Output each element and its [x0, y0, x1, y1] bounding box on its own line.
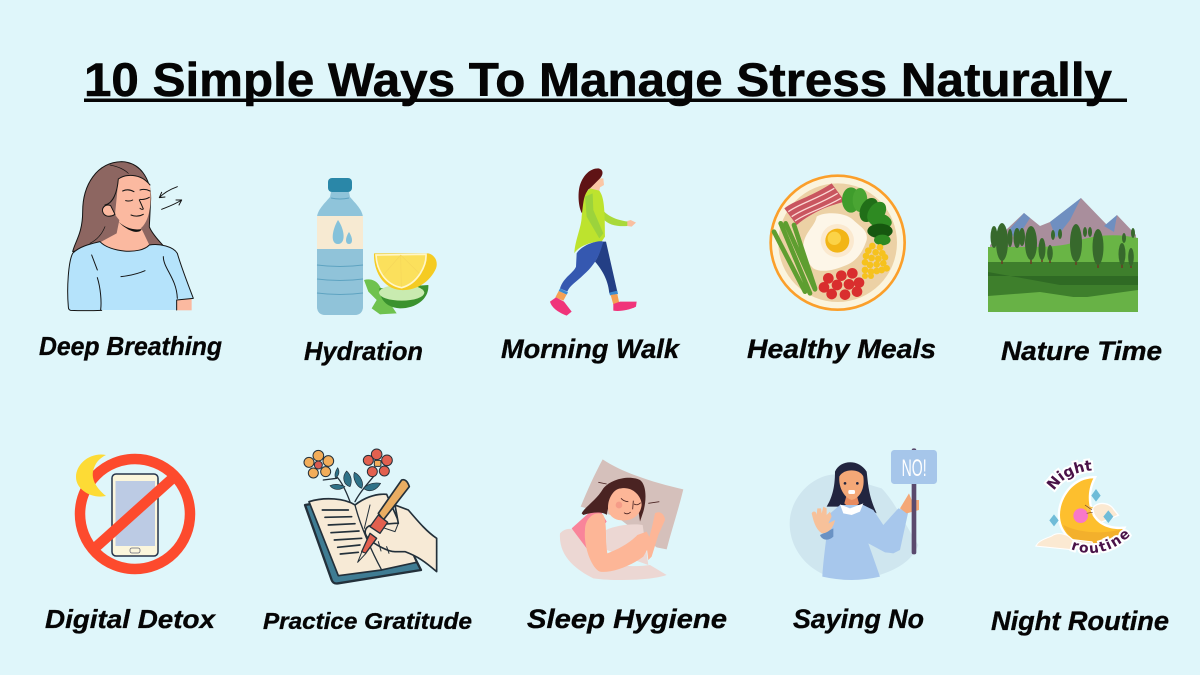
icon: water bottle [317, 178, 363, 315]
panel: night routine [991, 458, 1169, 636]
panel: sleep hygiene [527, 459, 727, 634]
label: Deep Breathing: Deep Breathing [39, 331, 222, 361]
panel: practice gratitude [263, 449, 472, 634]
panel: deep breathing [39, 162, 222, 361]
label: Nature Time: Nature Time [1001, 336, 1162, 366]
label: Sleep Hygiene: Sleep Hygiene [527, 604, 727, 634]
label: Hydration: Hydration [304, 336, 423, 366]
sticker word routine: routine [1069, 529, 1132, 556]
label: Practice Gratitude: Practice Gratitude [263, 608, 472, 634]
icon: mountain landscape [988, 198, 1138, 312]
label: Night Routine: Night Routine [991, 606, 1169, 636]
label: Morning Walk: Morning Walk [501, 334, 681, 364]
icon: mint, cucumber and lemon [364, 253, 437, 314]
title: 10 Simple Ways To Manage Stress Naturally [84, 53, 1112, 106]
icon: food plate [771, 176, 905, 310]
panel: hydration [304, 178, 437, 366]
label: Digital Detox: Digital Detox [45, 604, 217, 634]
icon: moon sticker [1035, 458, 1132, 556]
icon: walking woman [550, 168, 637, 316]
panel: morning walk [501, 168, 681, 364]
icon: journal with flowers and hand [304, 449, 437, 584]
panel: nature time [988, 198, 1162, 366]
panel: digital detox [45, 455, 217, 634]
sticker word Night: Night [1044, 458, 1094, 492]
icon: sleeping woman [560, 459, 683, 580]
icon: crossed-out phone [76, 455, 190, 569]
icon: woman breathing [68, 162, 193, 311]
icon: woman holding NO sign [790, 448, 937, 580]
label: Healthy Meals: Healthy Meals [747, 334, 936, 364]
label: Saying No: Saying No [793, 604, 924, 634]
panel: healthy meals [747, 176, 936, 364]
sign text: NO! [902, 455, 927, 482]
panel: saying no [790, 448, 937, 634]
